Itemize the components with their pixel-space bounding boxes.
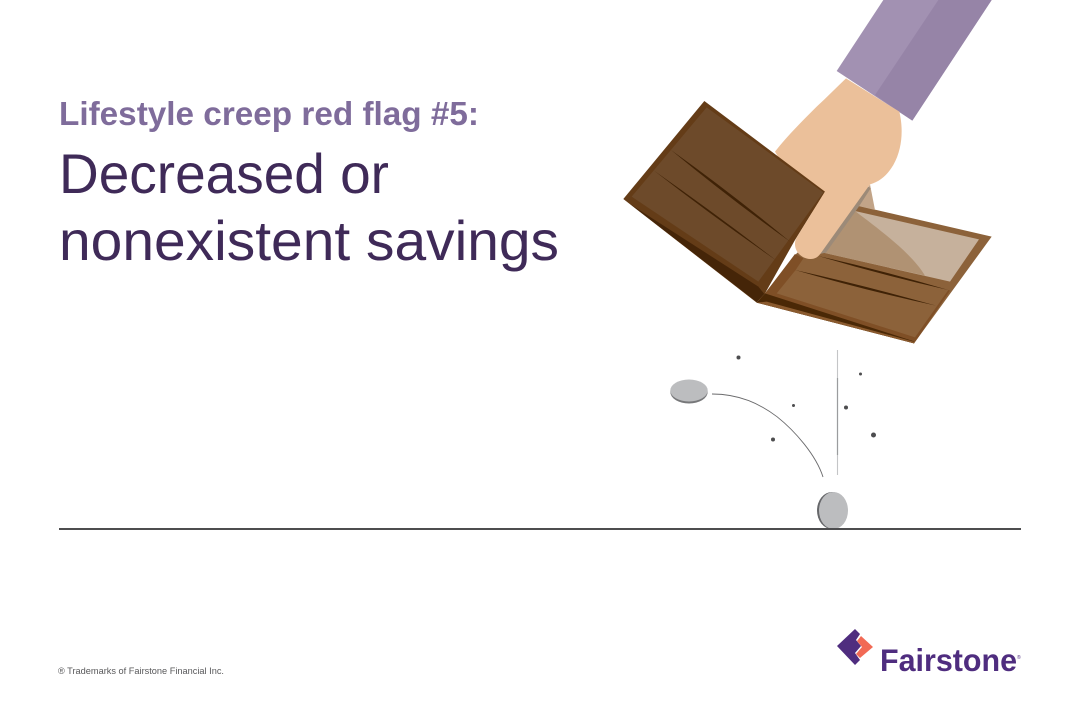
card slot lower [795,270,936,306]
finger shadow [819,184,875,254]
illustration: hand holding empty wallet [623,0,992,343]
logo mark [837,629,873,665]
coin trajectory curve [712,394,823,477]
vertical motion line [836,350,838,475]
debris dots [736,356,876,442]
lower pocket border [765,254,950,343]
hand [775,78,902,233]
eyebrow heading: Lifestyle creep red flag #5: [59,96,479,133]
main title: nonexistent savings [59,209,559,272]
Fairstone logo [837,629,1021,678]
sleeve [837,0,992,121]
coin in air [670,380,708,404]
wallet right side [757,205,992,343]
card slot upper [671,150,790,242]
card slot lower [654,171,776,260]
logo wordmark: Fairstone [880,642,1017,678]
ground line [59,528,1021,530]
wallet window [823,211,979,282]
main title [59,142,559,272]
footnote: ® Trademarks of Fairstone Financial Inc. [58,666,224,677]
wallet left side [623,101,825,303]
falling coins and motion lines [670,350,876,529]
card slot upper [818,256,948,290]
main title: Decreased or [59,142,389,205]
finger over wallet [795,167,870,259]
dark underside [757,293,914,343]
coin on ground [817,492,848,529]
registered mark: ® [1017,654,1021,661]
